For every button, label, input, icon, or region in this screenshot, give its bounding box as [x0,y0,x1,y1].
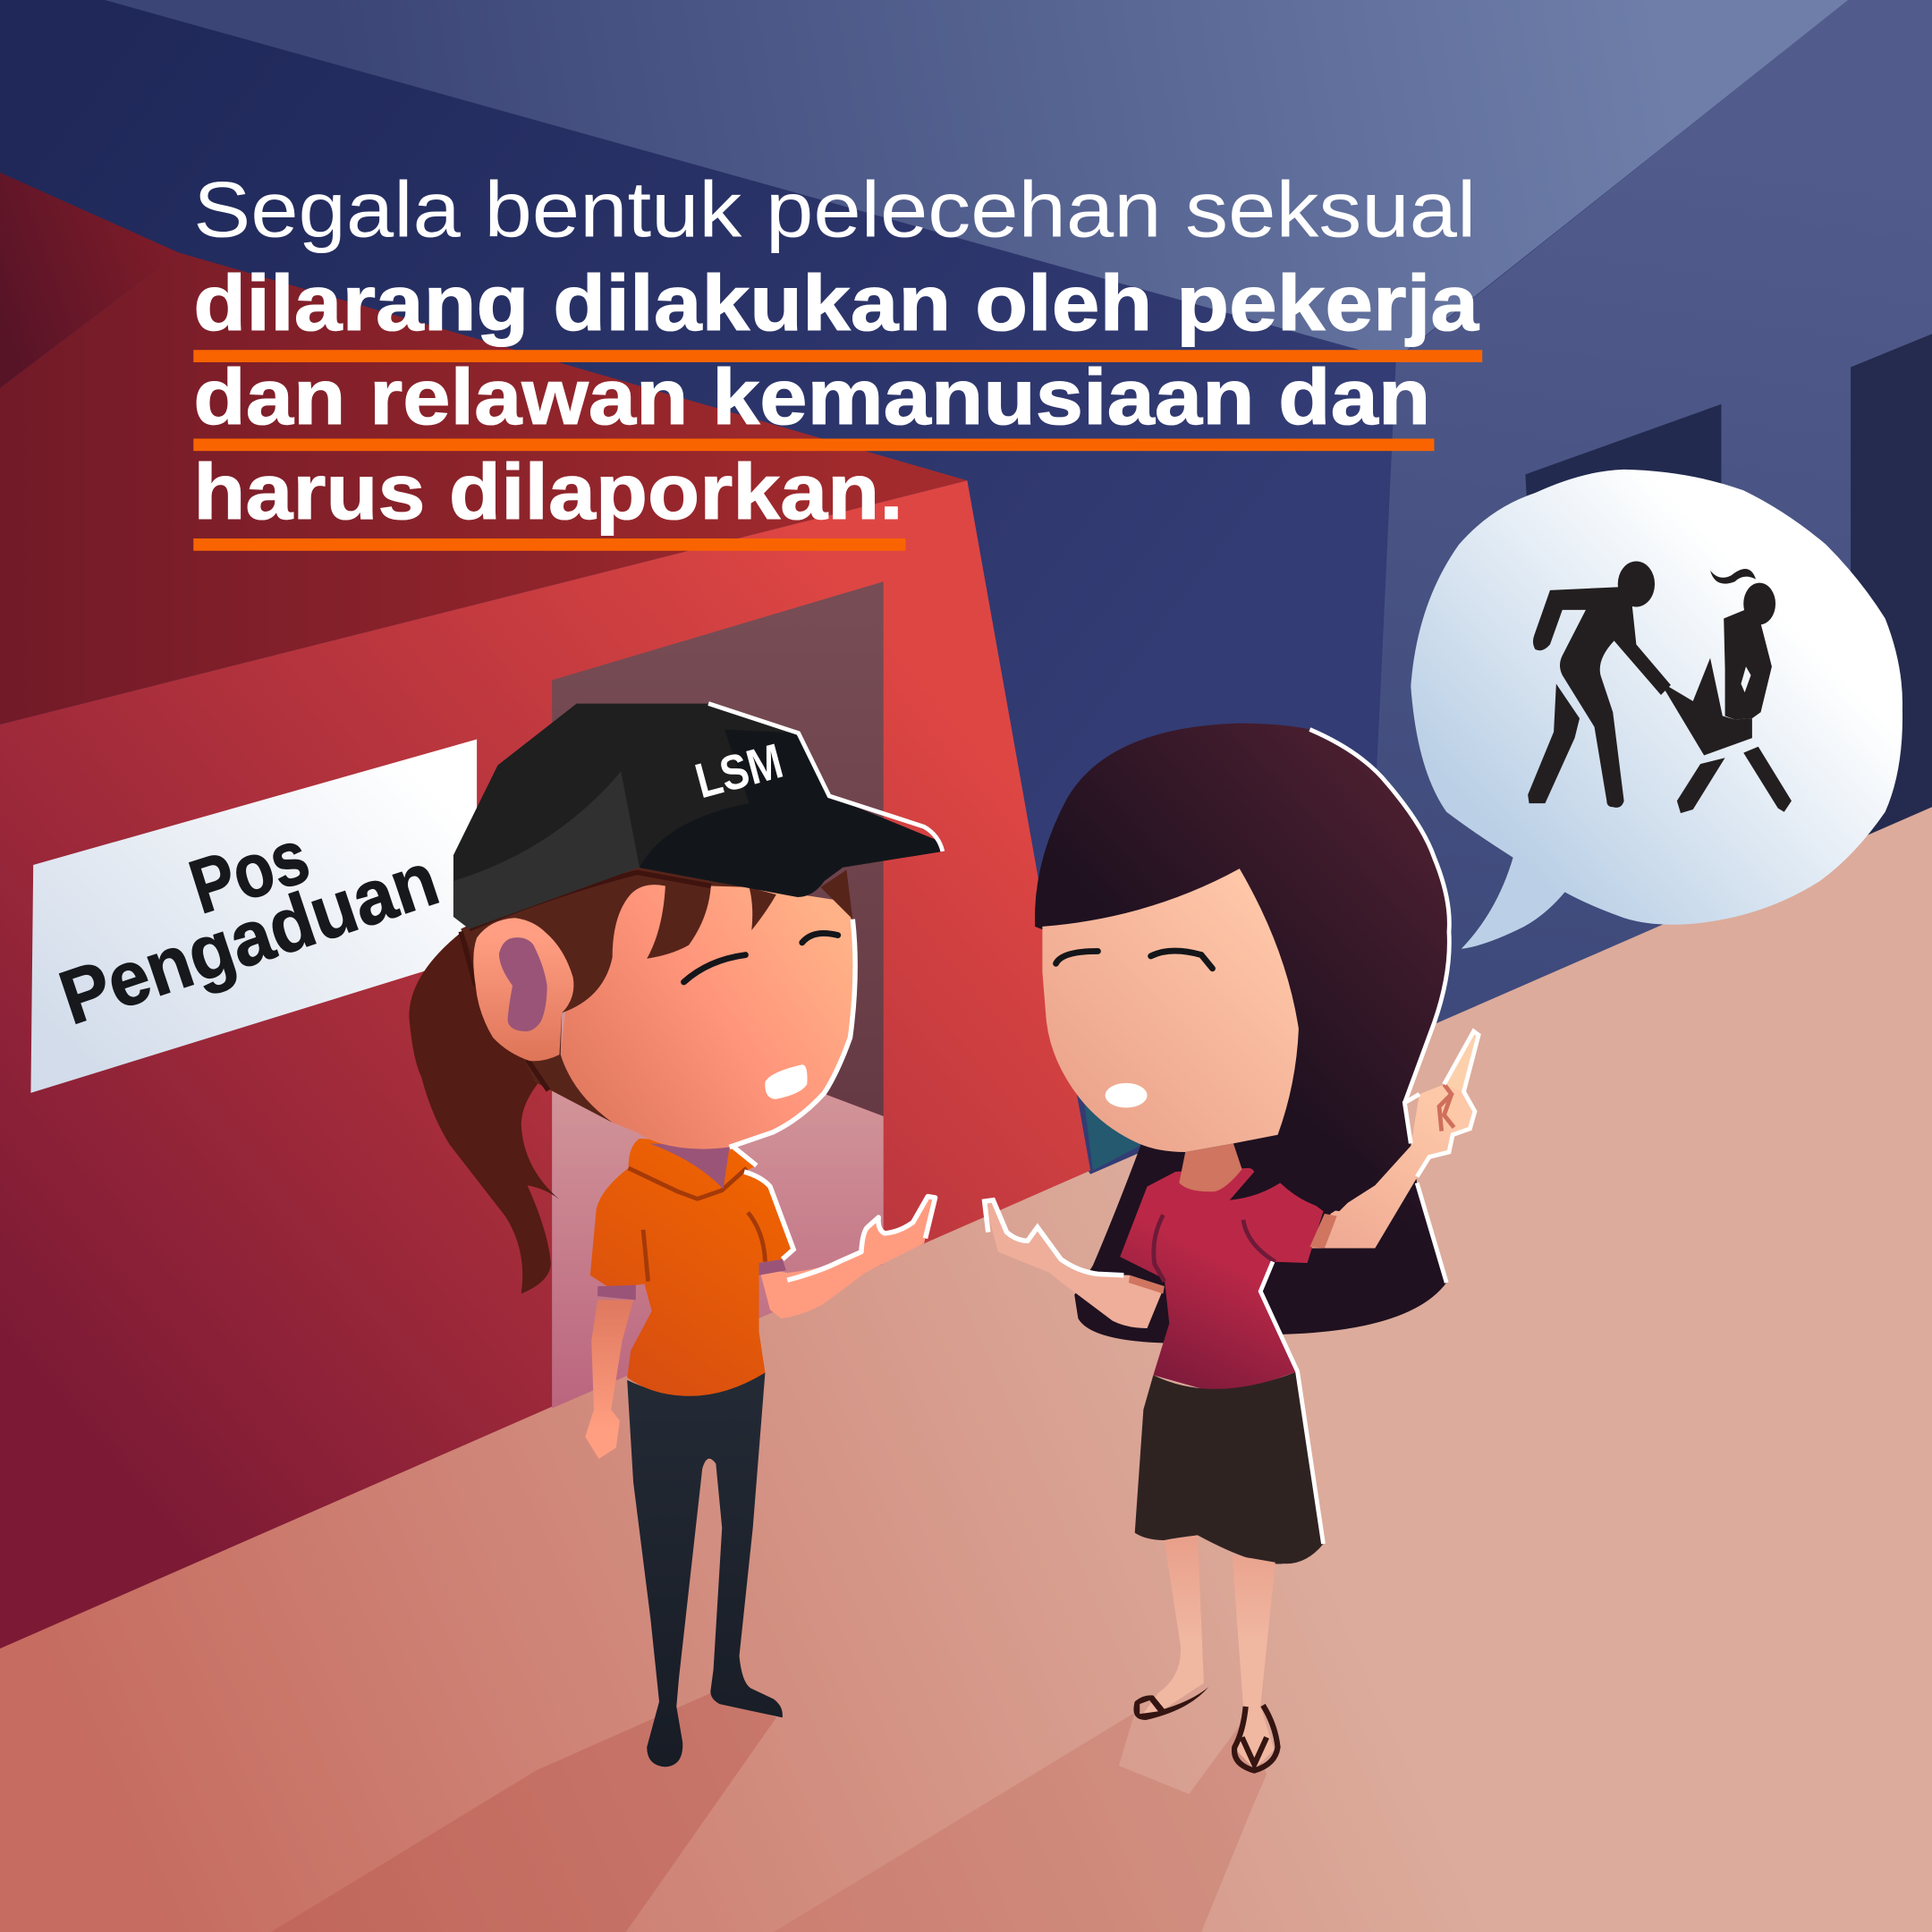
cap with LSM logo: LSM [690,733,788,809]
outline: hair and body [1260,730,1449,1544]
arm: raised hand [759,1195,936,1318]
face outline [730,919,855,1147]
sign: Pos Pengaduan: Pengaduan [50,836,448,1041]
cap with LSM logo [453,704,943,929]
hair: fringe and side [461,868,852,1123]
floor [0,807,1932,1932]
shirt: orange [590,1139,793,1396]
ponytail [409,918,564,1293]
arm: hanging [585,1300,633,1459]
background: light wedge [105,0,1848,360]
headline: harus dilaporkan. [193,447,903,536]
sandals [1133,1687,1278,1771]
hair shadow strokes [461,872,711,1090]
ear [473,918,573,1061]
headline: dan relawan kemanusiaan dan [193,352,1430,441]
background: right building [1361,0,1932,1060]
headline: dilarang dilakukan oleh pekerja [193,258,1479,347]
face [561,870,854,1149]
sign: Pos Pengaduan [30,740,477,1093]
shadow: left character [271,1693,776,1932]
skirt [1135,1371,1323,1564]
eyes [684,933,838,982]
icon: harassment pictogram [1528,561,1792,813]
neck collar [649,1143,730,1189]
underlines [193,350,1482,551]
arm: pointing up [1309,1031,1479,1283]
shadow: right character [774,1713,1267,1932]
speech bubble [1411,470,1902,949]
headline [193,165,1479,536]
top: maroon shirt [1120,1168,1337,1391]
panel: complaint post building [0,173,1146,1648]
character: aid worker with cap [409,704,943,1767]
face [1042,869,1299,1152]
mouth [1106,1083,1147,1107]
neck [1179,1143,1242,1191]
hair lock on shoulder [1230,1109,1380,1211]
title text with underlines [193,165,1482,551]
eyes [1056,951,1213,969]
arm: gesture [985,1200,1165,1328]
headline: Segala bentuk pelecehan seksual [193,165,1476,253]
character: woman speaking [985,724,1479,1771]
pants [627,1373,783,1767]
sign: Pos Pengaduan: Pos [181,814,318,930]
legs [1142,1535,1275,1769]
hair: long back [1035,724,1449,1343]
mouth [765,1064,808,1099]
